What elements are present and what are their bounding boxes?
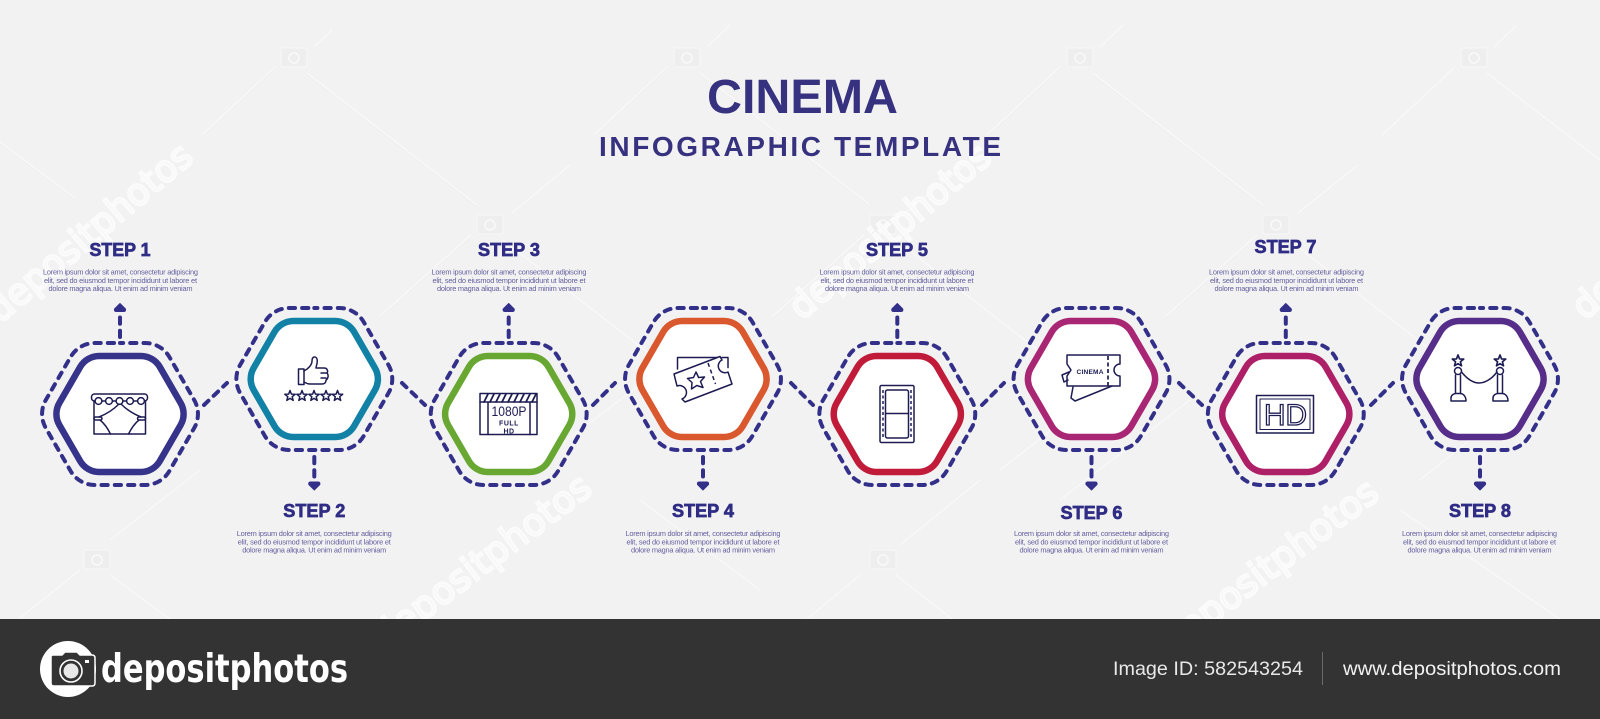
step 4 hexagon [625,308,781,450]
step 6 text [1014,503,1169,554]
step 2 text: Lorem ipsum dolor sit amet, consectetur adipiscing [237,529,392,538]
icon: stage curtains [92,394,148,434]
footer logo: depositphotos [101,647,348,692]
step 3 text: elit, sed do eiusmod tempor incididunt ut labore et [432,276,586,285]
step 2 text [237,501,392,554]
step 3 text: dolore magna aliqua. Ut enim ad minim veniam [437,284,581,293]
icon: film strip [880,386,914,442]
step 4 text: dolore magna aliqua. Ut enim ad minim veniam [631,546,775,554]
arrow up step 3 [503,304,514,337]
connector 2-3 [402,383,425,405]
step 2 text: dolore magna aliqua. Ut enim ad minim veniam [242,546,386,554]
connector 3-4 [593,383,615,405]
arrow up step 1 [114,304,126,337]
step 2 text: elit, sed do eiusmod tempor incididunt ut labore et [238,538,391,546]
watermark pattern: depositphotos [780,134,999,328]
footer logo [40,641,348,697]
connector 5-6 [982,383,1004,405]
icon: thumbs up with stars [285,357,343,400]
icon: cinema tickets [1062,355,1120,401]
step 7 text: Lorem ipsum dolor sit amet, consectetur adipiscing [1209,268,1364,276]
arrow down step 4 [697,457,709,490]
step 7 hexagon [1208,343,1364,485]
step 8 text: elit, sed do eiusmod tempor incididunt ut labore et [1403,538,1556,546]
image id: Image ID: 582543254 [1113,658,1303,680]
step 5 hexagon [819,343,975,485]
step 8 text: Lorem ipsum dolor sit amet, consectetur adipiscing [1402,529,1557,538]
step 3 text: Lorem ipsum dolor sit amet, consectetur adipiscing [432,268,586,276]
icon: 1080p full hd clapper: HD [503,428,515,436]
step 6 text: Lorem ipsum dolor sit amet, consectetur adipiscing [1014,529,1169,538]
icon: 1080p full hd clapper [480,394,537,436]
step 1 text: elit, sed do eiusmod tempor incididunt ut labore et [44,276,197,285]
website url: www.depositphotos.com [1342,658,1561,680]
step 7 text [1209,237,1364,293]
step 6 text: dolore magna aliqua. Ut enim ad minim veniam [1020,546,1164,554]
icon: cinema tickets: CINEMA [1076,369,1104,376]
step 7 text: STEP 7 [1254,237,1316,257]
subtitle: INFOGRAPHIC TEMPLATE [599,131,1001,162]
arrow up step 7 [1280,304,1291,337]
step 1 text: Lorem ipsum dolor sit amet, consectetur adipiscing [43,268,198,276]
step 1 text [43,240,198,293]
step 5 text: Lorem ipsum dolor sit amet, consectetur adipiscing [820,268,974,276]
step 5 text: dolore magna aliqua. Ut enim ad minim veniam [825,284,969,293]
connector 7-8 [1371,383,1393,405]
icon: star ticket [674,356,732,402]
step 5 text [820,240,974,293]
step 4 text: elit, sed do eiusmod tempor incididunt ut labore et [626,538,780,546]
step 2 hexagon [236,308,392,450]
step 4 text: STEP 4 [672,501,734,521]
step 1 text: STEP 1 [90,240,150,260]
icon: hd badge: HD [1264,399,1307,432]
step 1 hexagon [42,343,198,485]
step 8 text: dolore magna aliqua. Ut enim ad minim veniam [1408,546,1552,554]
icon: velvet rope stanchions [1451,355,1508,401]
arrow down step 2 [309,457,320,490]
step 6 text: STEP 6 [1060,503,1122,523]
step 8 text [1402,501,1557,554]
step 1 text: dolore magna aliqua. Ut enim ad minim veniam [48,284,192,293]
step 5 text: elit, sed do eiusmod tempor incididunt ut labore et [820,276,974,285]
watermark pattern: depositphotos [1152,470,1387,662]
arrow down step 6 [1086,457,1097,490]
arrow up step 5 [892,304,903,337]
icon: 1080p full hd clapper: FULL [499,420,519,428]
step 8 hexagon [1402,308,1558,450]
step 5 text: STEP 5 [866,240,928,260]
footer bar [0,619,1600,719]
connector 4-5 [791,383,813,405]
watermark pattern: depositphotos [365,465,600,657]
step 3 text [432,240,586,293]
arrow down step 8 [1474,457,1486,490]
step 7 text: dolore magna aliqua. Ut enim ad minim veniam [1214,284,1358,293]
connector 6-7 [1179,383,1202,405]
step 7 text: elit, sed do eiusmod tempor incididunt ut labore et [1210,276,1363,285]
step 3 hexagon [431,343,587,485]
step 4 text: Lorem ipsum dolor sit amet, consectetur adipiscing [626,529,780,538]
step 8 text: STEP 8 [1449,501,1511,521]
step 6 text: elit, sed do eiusmod tempor incididunt ut labore et [1015,538,1168,546]
step 4 text [626,501,780,554]
step 2 text: STEP 2 [283,501,345,521]
step 6 hexagon [1014,308,1169,450]
connector 1-2 [204,383,227,405]
title: CINEMA [707,71,898,124]
icon: hd badge [1256,396,1314,433]
icon: 1080p full hd clapper: 1080P [492,404,526,419]
step 3 text: STEP 3 [478,240,540,260]
